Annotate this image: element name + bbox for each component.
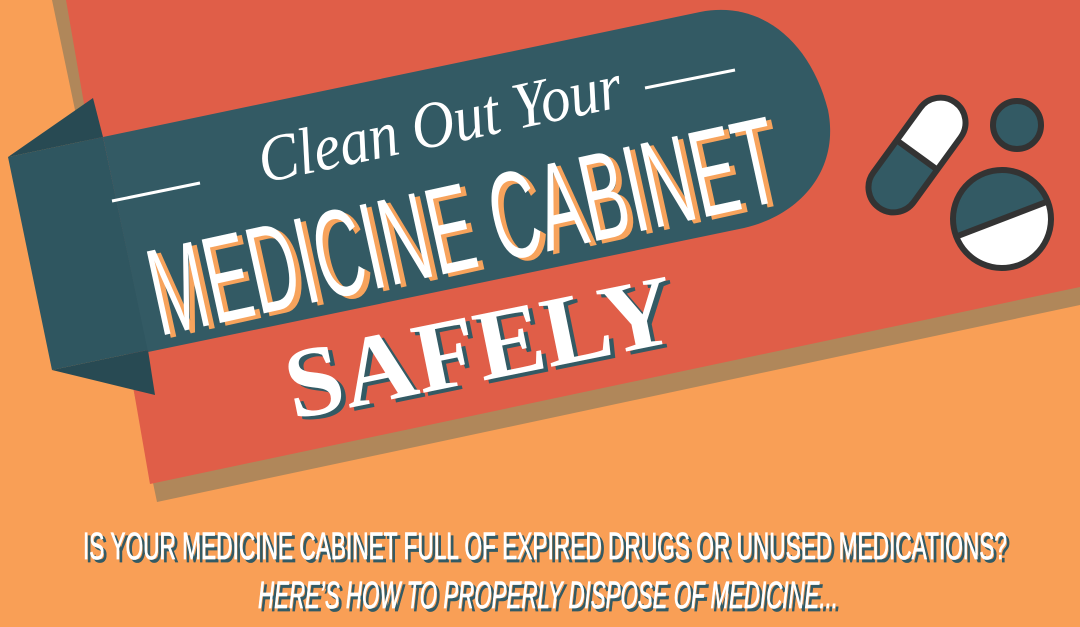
icon: capsule <box>859 88 975 222</box>
ribbon banner <box>8 10 830 395</box>
heading: MEDICINE CABINET <box>136 90 796 366</box>
decorative lines <box>112 70 735 201</box>
heading: SAFELY: SAFELY <box>275 253 684 441</box>
heading: SAFELY: SAFELY <box>280 256 689 444</box>
subtitle line 2 <box>258 575 841 620</box>
panel: red background <box>66 0 1080 484</box>
panel shadow <box>52 0 1080 502</box>
icon: round tablet <box>939 156 1065 282</box>
heading: Clean Out Your: Clean Out Your <box>251 49 629 198</box>
icon: small pill <box>993 101 1041 149</box>
